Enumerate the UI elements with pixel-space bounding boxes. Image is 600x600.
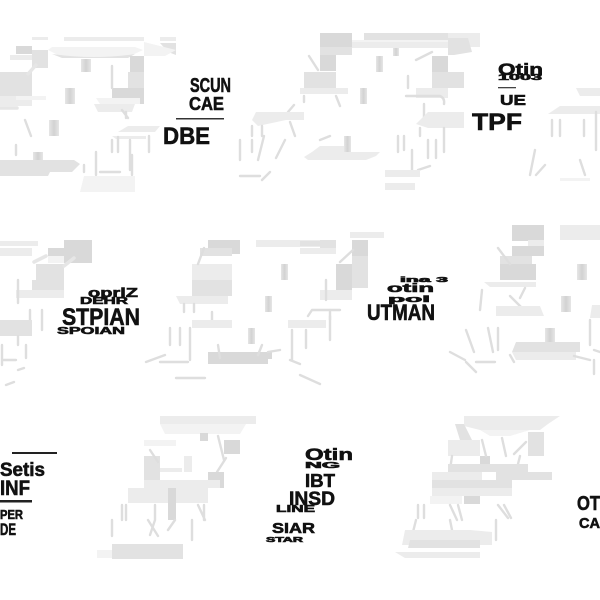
scene 1: table and chairs, top left [0, 37, 176, 192]
left chair [176, 240, 240, 320]
text block 3: SPOIAN [57, 326, 125, 337]
chair legs [97, 505, 205, 559]
text block 4: otin [387, 281, 434, 295]
text block 7: lower right edge [577, 493, 600, 532]
text block 4: UTMAN [367, 300, 435, 325]
text block 2 [472, 60, 543, 136]
text block 4: ina 3 [400, 277, 448, 284]
text block 2: UE [500, 92, 526, 109]
text block 1: DBE [163, 123, 210, 150]
text block 6: lower centre: Otin [305, 445, 353, 464]
text block 6: lower centre: SIAR [272, 520, 315, 537]
right stool [258, 310, 330, 384]
table top [352, 33, 452, 48]
scene 2: table and chairs, top centre [240, 33, 480, 190]
text block 6: lower centre: STAR [266, 537, 303, 544]
side stool [80, 126, 160, 192]
text block 6: lower centre: NG [305, 461, 340, 470]
text block 3: STPIAN [62, 304, 140, 331]
right chair [406, 33, 480, 120]
chair [16, 240, 92, 330]
left chair [480, 225, 544, 312]
chair backs [144, 436, 240, 472]
text block 6: lower centre: LINE [276, 504, 316, 515]
table top [256, 240, 336, 254]
chair seats [128, 468, 224, 520]
table pole and base [0, 59, 91, 176]
text block 5: lower left: Setis [0, 460, 45, 481]
text block 2: TPF [472, 109, 522, 136]
text block 4 [367, 277, 448, 325]
table pole and base [304, 48, 399, 160]
text block 3: DEHR [80, 296, 129, 307]
text block 5: lower left [0, 452, 57, 539]
scene 8: stacked chairs, lower centre right [395, 416, 560, 558]
right stool [385, 112, 464, 190]
scene 4: table and chairs, middle left [0, 240, 92, 385]
text block 4: pol [388, 294, 430, 304]
scene 3: partial set, far right top [530, 88, 600, 181]
text block 6: lower centre [266, 445, 353, 544]
table top [464, 416, 560, 436]
table top [0, 241, 38, 256]
table pole and base [512, 264, 587, 360]
text block 5: lower left: PER [0, 507, 24, 522]
right chair [94, 42, 176, 118]
text block 6: lower centre: IBT [305, 471, 335, 491]
text block 5: lower left: DE [0, 520, 16, 539]
chair backs [448, 424, 544, 472]
text block 5: lower left: INF [0, 477, 30, 500]
table pole and base [208, 264, 288, 364]
seat and legs [450, 306, 544, 372]
left stool [240, 112, 304, 180]
text block 1: CAE [189, 94, 224, 114]
text block 6: lower centre: INSD [289, 489, 335, 510]
table top [160, 416, 256, 441]
chair legs and base [395, 505, 511, 558]
left chair [0, 46, 48, 155]
text block 1: SCUN [190, 75, 231, 97]
text block 3 [57, 285, 140, 337]
scene 6: table and chairs, middle right [450, 225, 600, 374]
text block 3: oprlZ [88, 285, 138, 300]
stool [0, 320, 32, 385]
right chair [308, 232, 384, 320]
table top [560, 225, 600, 240]
scene 5: table and chairs, middle centre [146, 232, 384, 384]
text block 1 [163, 75, 231, 150]
right edge stool [574, 305, 600, 374]
table top [32, 37, 176, 58]
left chair [288, 33, 352, 140]
text block 2: 1003 [498, 73, 543, 82]
left stool [146, 320, 232, 378]
scene 7: stacked chairs, lower centre left [97, 416, 256, 559]
text block 2: Otin [498, 60, 543, 79]
chair seats [430, 464, 552, 504]
